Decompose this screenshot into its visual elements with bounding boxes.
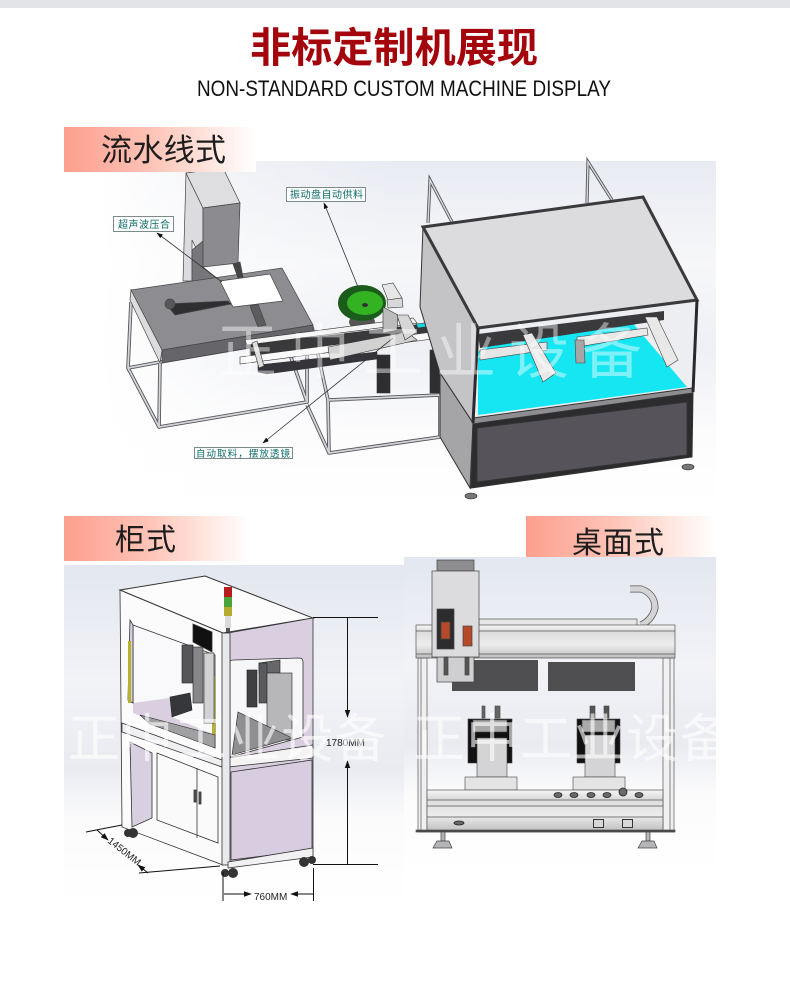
dispensing head carriage	[432, 560, 479, 682]
work fixture right	[573, 706, 625, 790]
watermark: lower panels: 正中工业设备	[68, 711, 388, 769]
cable chain	[630, 589, 655, 625]
panel background	[100, 161, 716, 504]
cross beam	[416, 619, 675, 658]
dimension: depth 1450MM	[86, 825, 220, 873]
callout: auto pick and place: 自动取料，摆放透镜	[196, 448, 290, 460]
panel: desktop type	[404, 557, 716, 870]
power switches	[594, 820, 632, 828]
subtitle: NON-STANDARD CUSTOM MACHINE DISPLAY	[197, 76, 611, 101]
callout: ultrasonic bonding	[114, 216, 174, 232]
panel: cabinet type	[64, 565, 404, 903]
dimension: width 760MM	[223, 868, 314, 903]
signal tower light	[224, 587, 232, 632]
top grey strip	[0, 0, 790, 8]
watermark: lower panels: 正中工业设备	[413, 711, 733, 769]
frame posts	[418, 658, 674, 832]
leader arrows	[157, 203, 393, 443]
dimension: depth 1450MM: 1450MM	[105, 836, 143, 868]
ultrasonic press station	[130, 168, 313, 363]
panel background	[404, 557, 716, 870]
gantry arms	[480, 317, 678, 382]
heading: inline type: 流水线式	[101, 133, 226, 168]
cabinet left face	[120, 590, 223, 865]
heading: cabinet type	[64, 516, 250, 561]
dimension: height 1780MM	[313, 617, 378, 864]
work fixture left	[465, 706, 517, 790]
dark rear panels	[452, 660, 635, 691]
centre support frame	[307, 327, 440, 453]
heading: cabinet type: 柜式	[115, 524, 176, 557]
panel background	[64, 565, 404, 903]
watermark: 正中工业设备	[217, 319, 655, 386]
conveyor belt	[240, 283, 440, 393]
levelling feet	[433, 832, 657, 848]
heading: desktop type	[526, 516, 716, 560]
heading: inline type	[64, 127, 256, 172]
levelling feet	[465, 464, 694, 499]
panel: inline conveyor type	[100, 161, 716, 504]
cabinet right face	[222, 618, 313, 868]
cabinet machine frame rails	[428, 162, 612, 223]
casters	[124, 828, 316, 878]
dimension: height 1780MM: 1780MM	[326, 738, 365, 749]
control buttons	[454, 788, 643, 825]
machine base	[416, 790, 675, 832]
callout: ultrasonic bonding: 超声波压合	[118, 218, 170, 231]
callout: vibrating feeder: 振动盘自动供料	[290, 188, 363, 201]
cabinet right window mechanism	[232, 660, 292, 755]
heading: desktop type: 桌面式	[572, 527, 664, 560]
cabinet left window mechanism	[140, 645, 215, 748]
enclosed cabinet machine	[420, 197, 697, 488]
press table frame	[128, 302, 307, 427]
cabinet top	[120, 576, 313, 633]
dimension: width 760MM: 760MM	[254, 892, 287, 903]
title: 非标定制机展现	[250, 25, 538, 71]
vibrating bowl feeder	[338, 285, 386, 330]
